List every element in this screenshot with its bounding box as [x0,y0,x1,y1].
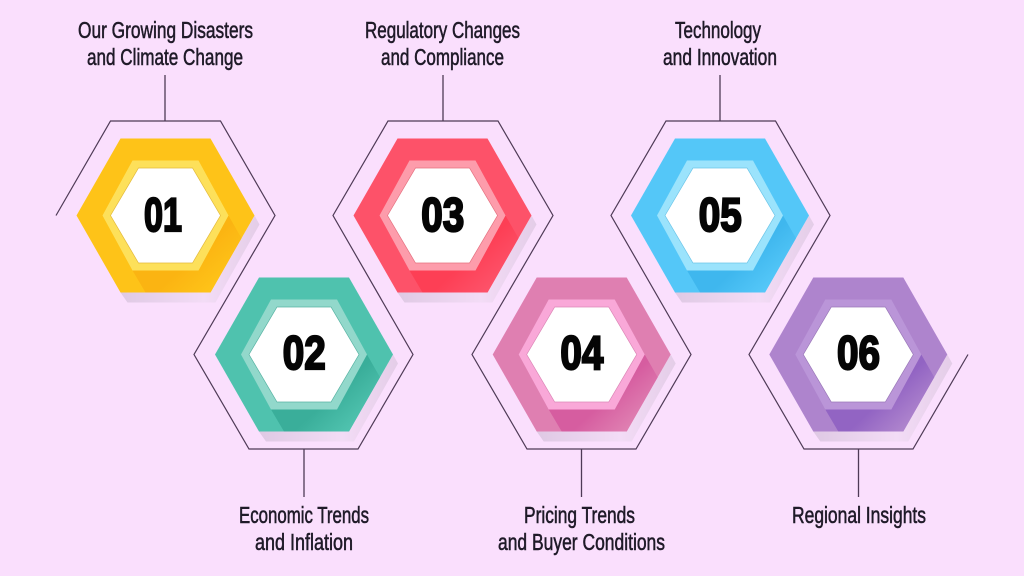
label: Pricing Trends and Buyer Conditions: and Buyer Conditions [498,529,665,555]
label: Technology and Innovation: Technology [675,17,761,43]
hexagon 04 [493,278,676,442]
label: Our Growing Disasters and Climate Change: Our Growing Disasters [78,17,253,43]
label: Technology and Innovation [663,17,777,70]
connector lines [165,75,858,497]
number 05: 05 [699,188,742,241]
hexagon 06 [769,278,952,442]
number 01: 01 [144,188,182,241]
number 06: 06 [837,326,880,379]
number 04: 04 [560,326,603,379]
label: Regulatory Changes and Compliance: Regulatory Changes [365,17,520,43]
zigzag hexagon outline [56,121,968,449]
number 02: 02 [283,326,326,379]
label: Technology and Innovation: and Innovation [663,44,777,70]
label: Regulatory Changes and Compliance [365,17,520,70]
label: Economic Trends and Inflation [239,502,369,555]
label: Economic Trends and Inflation: Economic Trends [239,502,369,528]
label: Economic Trends and Inflation: and Inflation [255,529,353,555]
number 03: 03 [421,188,464,241]
hexagon 02 [215,278,398,442]
hexagon 01 [76,138,260,302]
label: Our Growing Disasters and Climate Change: and Climate Change [87,44,243,70]
label: Pricing Trends and Buyer Conditions: Pricing Trends [524,502,635,528]
hexagon 03 [354,138,536,302]
label: Regional Insights: Regional Insights [792,502,926,528]
hexagon 05 [631,138,814,302]
label: Pricing Trends and Buyer Conditions [498,502,665,555]
label: Our Growing Disasters and Climate Change [78,17,253,70]
label: Regulatory Changes and Compliance: and Compliance [381,44,504,70]
